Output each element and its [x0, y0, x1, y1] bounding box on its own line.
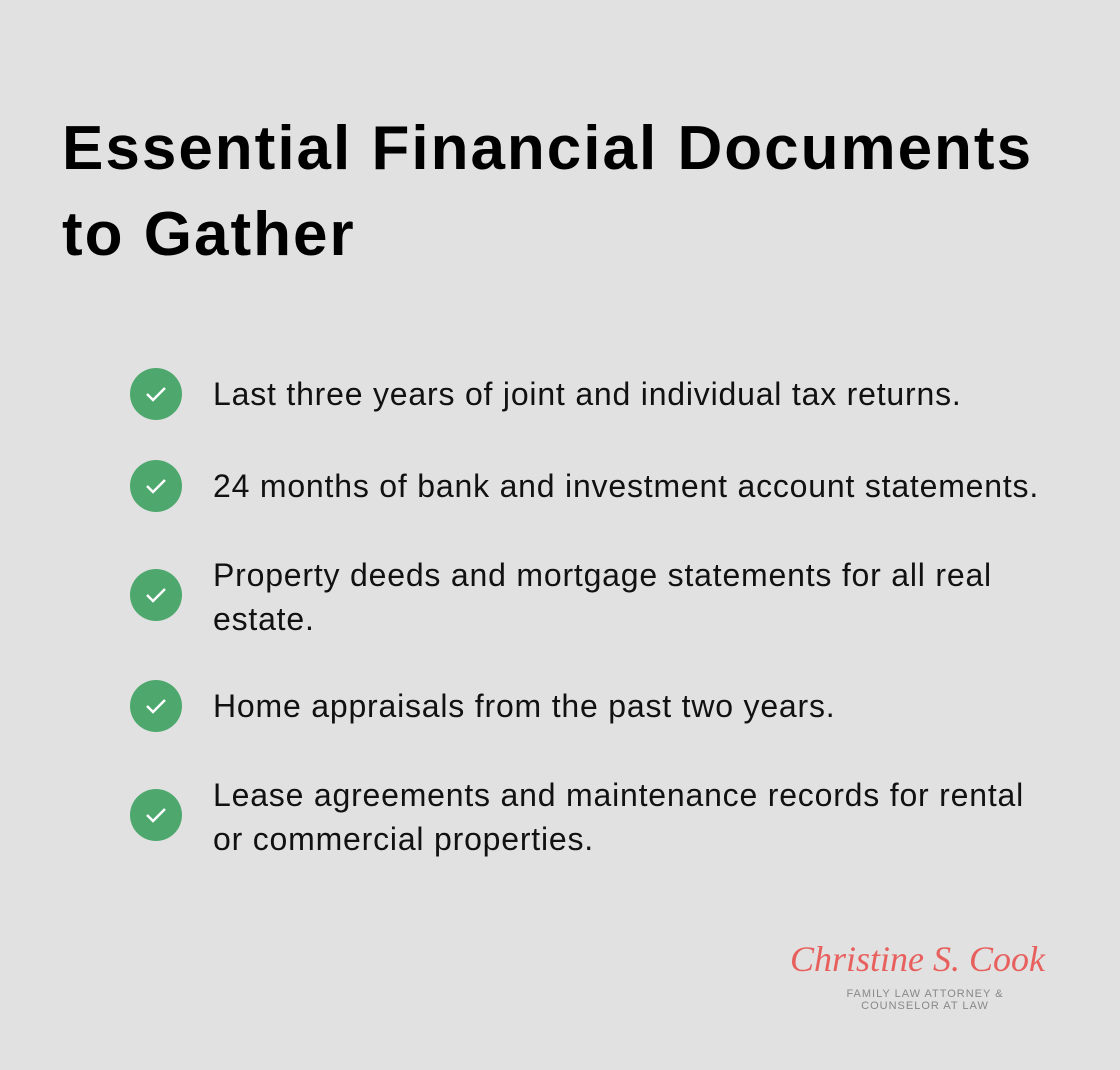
text	[213, 557, 992, 637]
text: Property deeds and mortgage statements for all real	[213, 557, 992, 593]
text: or commercial properties.	[213, 821, 594, 857]
title: to Gather	[62, 200, 356, 269]
title: Essential Financial Documents	[62, 114, 1033, 183]
item 3	[130, 557, 992, 637]
logo script name: Christine S. Cook	[790, 939, 1045, 979]
text: Lease agreements and maintenance records for rental	[213, 777, 1024, 813]
text: Home appraisals from the past two years.	[213, 688, 835, 724]
text	[213, 777, 1024, 857]
logo subtitle: COUNSELOR AT LAW	[861, 1000, 989, 1012]
icon: check	[130, 368, 182, 420]
icon: check	[130, 569, 182, 621]
title	[62, 114, 1033, 269]
text: Last three years of joint and individual tax returns.	[213, 376, 962, 412]
icon: check	[130, 680, 182, 732]
icon: check	[130, 460, 182, 512]
text: 24 months of bank and investment account statements.	[213, 468, 1039, 504]
item 2	[130, 460, 1039, 512]
item 4	[130, 680, 835, 732]
item 5	[130, 777, 1024, 857]
item 1	[130, 368, 962, 420]
logo subtitle	[846, 988, 1004, 1012]
icon: check	[130, 789, 182, 841]
text: estate.	[213, 601, 315, 637]
logo subtitle: FAMILY LAW ATTORNEY &	[846, 988, 1004, 1000]
logo	[790, 939, 1046, 1012]
